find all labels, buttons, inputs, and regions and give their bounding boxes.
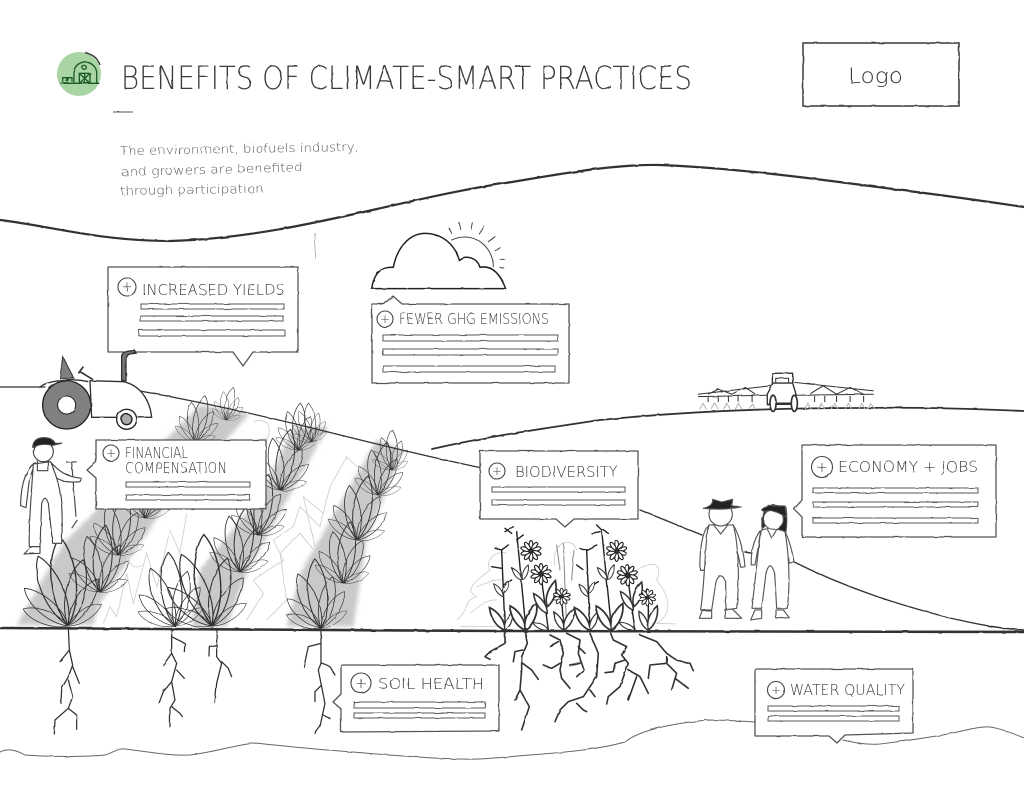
card: water quality: WATER QUALITY	[790, 681, 905, 699]
card: financial compensation	[87, 440, 266, 509]
card: water quality	[755, 669, 913, 743]
card: water quality: +	[771, 683, 781, 697]
logo placeholder: Logo	[848, 64, 903, 88]
card: increased yields: +	[122, 280, 132, 295]
card: economy and jobs: +	[816, 460, 828, 476]
cloud	[372, 233, 506, 289]
icon: barn badge	[57, 52, 101, 96]
subtitle: and growers are benefited	[121, 160, 303, 179]
flowers	[457, 525, 677, 633]
card: biodiversity	[480, 451, 638, 527]
card: increased yields: INCREASED YIELDS	[142, 281, 285, 299]
card: soil health	[333, 665, 499, 732]
crop row shading	[17, 405, 403, 627]
subtitle	[113, 112, 359, 198]
roots	[54, 628, 693, 734]
crop rows: plants in perspective	[19, 382, 414, 633]
card: soil health: SOIL HEALTH	[378, 675, 484, 693]
card: financial compensation: COMPENSATION	[125, 459, 227, 477]
card: economy and jobs: ECONOMY + JOBS	[838, 458, 978, 476]
subtitle: The environment, biofuels industry,	[120, 140, 359, 158]
light scribbled ground cover	[103, 420, 357, 623]
two farmers	[699, 499, 794, 620]
card: economy and jobs	[794, 445, 996, 537]
landscape: sky hill line	[0, 165, 1024, 241]
card: fewer GHG emissions: +	[380, 312, 390, 326]
tractor	[39, 351, 152, 429]
ground line	[0, 628, 1024, 632]
sun	[449, 223, 504, 268]
card: financial compensation: +	[106, 446, 116, 460]
sprayer	[698, 373, 875, 411]
landscape: field hill lines	[0, 387, 1024, 630]
card: fewer GHG emissions: FEWER GHG EMISSIONS	[399, 310, 549, 328]
card: financial compensation: FINANCIAL	[125, 444, 188, 462]
water line	[0, 720, 1024, 759]
subtitle: through participation	[120, 181, 264, 198]
logo placeholder	[803, 43, 959, 106]
card: soil health: +	[355, 676, 367, 692]
card: increased yields	[108, 267, 298, 366]
card: biodiversity: BIODIVERSITY	[515, 463, 618, 481]
card: fewer GHG emissions	[372, 296, 569, 383]
farmer with hoe	[21, 438, 82, 554]
card: biodiversity: +	[492, 464, 502, 478]
title: BENEFITS OF CLIMATE-SMART PRACTICES	[121, 59, 692, 97]
